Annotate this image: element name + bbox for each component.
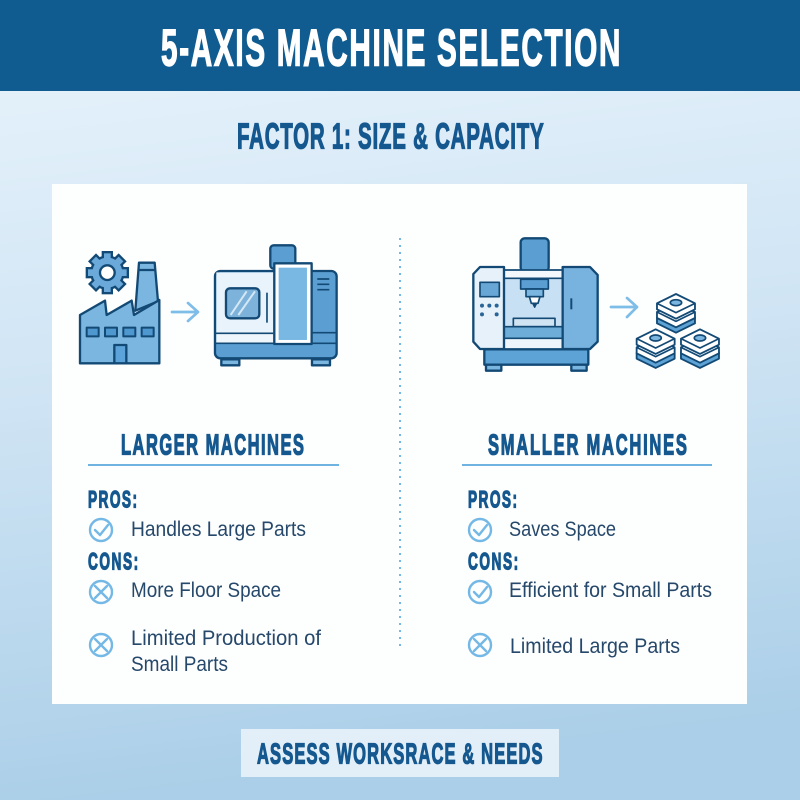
header banner [0, 0, 800, 91]
pros label: PROS: [88, 487, 137, 514]
heading: larger machines: LARGER MACHINES [121, 430, 304, 462]
con item: limited production: Limited Production of [131, 627, 321, 650]
icon: factory with gear [80, 251, 159, 363]
panel: larger machines [80, 245, 339, 676]
item: efficient for small parts: Efficient for Small Parts [509, 579, 712, 602]
con item: limited production [90, 627, 321, 676]
con item: more floor space [90, 579, 281, 603]
pro item: handles large parts: Handles Large Parts [131, 518, 306, 541]
con item: limited production: Small Parts [131, 653, 228, 676]
main panel [52, 184, 747, 704]
cons label: CONS: [88, 549, 138, 576]
icon: small CNC machine [473, 238, 598, 371]
cons label: CONS: [468, 549, 518, 576]
pro item: saves space [469, 518, 616, 541]
subtitle: FACTOR 1: SIZE & CAPACITY [237, 116, 544, 157]
arrow: factory to large machine [172, 303, 198, 321]
panel: smaller machines [462, 238, 719, 658]
callout: assess workspace: ASSESS WORKSRACE & NEEDS [257, 739, 543, 771]
pros label: PROS: [468, 487, 517, 514]
arrow: small machine to parts [611, 298, 637, 317]
con item: limited large parts: Limited Large Parts [510, 635, 680, 658]
icon: stacked parts [637, 294, 719, 368]
pro item: saves space: Saves Space [509, 518, 616, 541]
callout: assess workspace [241, 729, 559, 777]
con item: more floor space: More Floor Space [131, 579, 281, 602]
icon: large CNC machine [215, 245, 337, 365]
heading: smaller machines: SMALLER MACHINES [488, 430, 687, 462]
title: 5-AXIS MACHINE SELECTION [161, 19, 620, 76]
